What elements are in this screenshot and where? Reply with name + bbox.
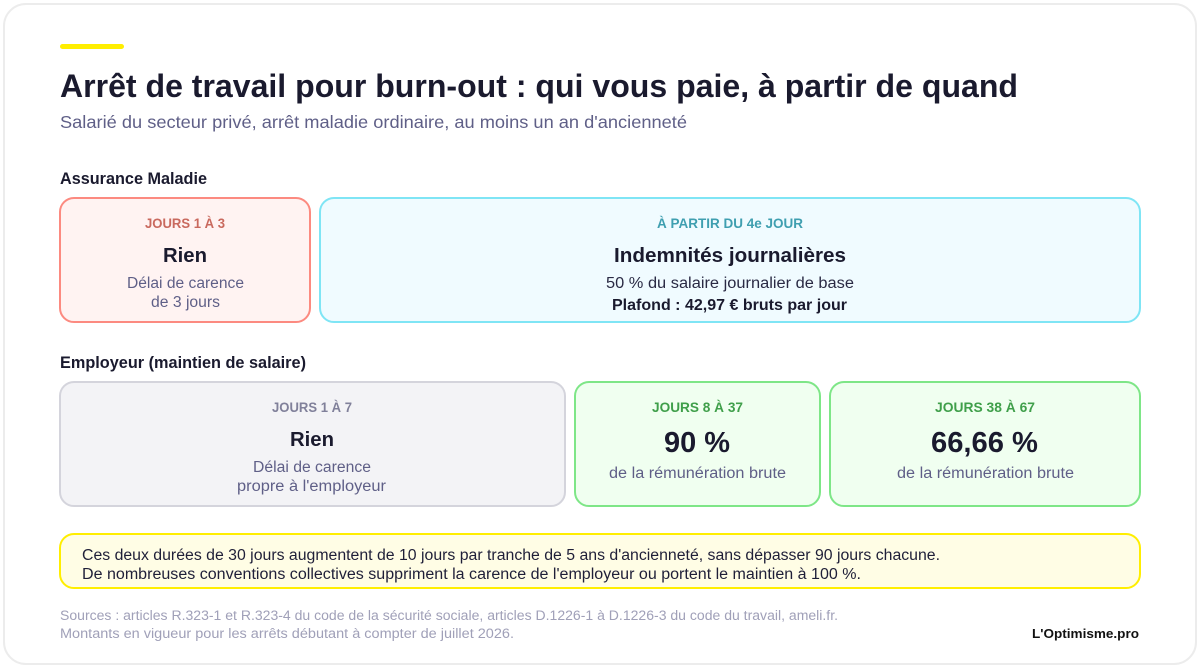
panel: jours 8 à 37 xyxy=(575,382,820,506)
panel: jours 1 à 3: de 3 jours xyxy=(151,294,220,311)
panel: jours 38 à 67: de la rémunération brute xyxy=(897,465,1074,482)
panel: à partir du 4e jour: Plafond : 42,97 € bruts par jour xyxy=(612,297,847,314)
panel: jours 1 à 7: JOURS 1 À 7 xyxy=(272,399,352,415)
panel: jours 38 à 67 xyxy=(830,382,1140,506)
panel: jours 1 à 3: Délai de carence xyxy=(127,275,244,292)
panel: jours 1 à 7: propre à l'employeur xyxy=(237,478,386,495)
callout: note: De nombreuses conventions collectives suppriment la carence de l'employeur ou portent le maintien à 100 %. xyxy=(82,566,861,583)
subtitle: Salarié du secteur privé, arrêt maladie ordinaire, au moins un an d'ancienneté xyxy=(60,112,687,132)
panel: jours 1 à 7: Rien xyxy=(290,428,334,451)
sources: Sources : articles R.323-1 et R.323-4 du code de la sécurité sociale, articles D.1226-1 à D.1226-3 du code du travail, ameli.fr. xyxy=(60,608,838,623)
sources xyxy=(60,608,838,641)
panel: jours 1 à 3 xyxy=(60,198,310,322)
panel: jours 1 à 3: JOURS 1 À 3 xyxy=(145,215,225,231)
panel: à partir du 4e jour: À PARTIR DU 4e JOUR xyxy=(657,215,803,231)
panel: à partir du 4e jour: 50 % du salaire journalier de base xyxy=(606,275,854,292)
panel: jours 1 à 7 xyxy=(60,382,565,506)
panel: jours 8 à 37: 90 % xyxy=(664,427,730,459)
panel: jours 1 à 7: Délai de carence xyxy=(253,459,371,476)
panel: jours 38 à 67: JOURS 38 À 67 xyxy=(935,399,1035,415)
panel: jours 1 à 3: Rien xyxy=(163,244,207,267)
sources: Montants en vigueur pour les arrêts débutant à compter de juillet 2026. xyxy=(60,626,514,641)
heading: Assurance Maladie: Assurance Maladie xyxy=(60,170,207,188)
callout: note: Ces deux durées de 30 jours augmentent de 10 jours par tranche de 5 ans d'ancienneté, sans dépasser 90 jours chacune. xyxy=(82,547,940,564)
panel: à partir du 4e jour xyxy=(320,198,1140,322)
title: Arrêt de travail pour burn-out : qui vous paie, à partir de quand xyxy=(60,68,1018,104)
panel: jours 8 à 37: de la rémunération brute xyxy=(609,465,786,482)
panel: jours 38 à 67: 66,66 % xyxy=(931,427,1038,459)
heading: Employeur: Employeur (maintien de salaire) xyxy=(60,354,306,372)
brand: L'Optimisme.pro xyxy=(1032,626,1139,641)
panel: à partir du 4e jour: Indemnités journalières xyxy=(614,244,846,267)
panel: jours 8 à 37: JOURS 8 À 37 xyxy=(652,399,743,415)
callout: note xyxy=(60,534,1140,588)
yellow accent bar xyxy=(60,44,124,49)
